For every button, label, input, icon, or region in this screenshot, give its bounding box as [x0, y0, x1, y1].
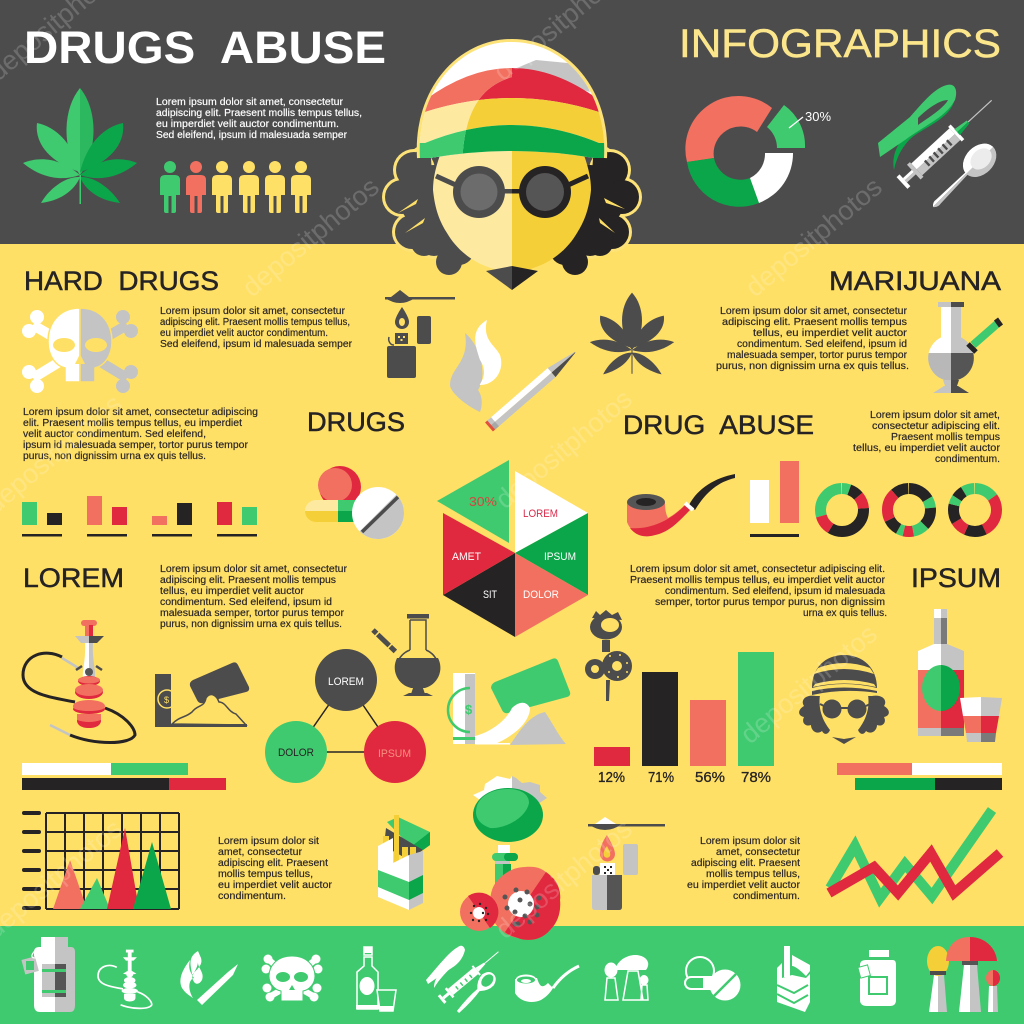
bar chart: percentages: 56%	[695, 769, 725, 786]
text block: marijuana: purus, non dignissim urna ex quis tellus.	[716, 361, 909, 372]
icon: poppy dark	[585, 610, 632, 701]
hexagon pie chart: 30%	[469, 494, 497, 509]
text block: bottom left: adipiscing elit. Praesent	[218, 858, 328, 869]
footer icon: smoke and cigarette	[180, 951, 238, 1005]
text block: ipsum: semper, tortor purus tempor purus, non dignissim	[655, 597, 885, 608]
watermarks: depositphotos	[735, 619, 883, 750]
footer icon: tourniquet, syringe and spoon	[426, 946, 502, 1017]
text block: left middle: Lorem ipsum dolor sit amet, consectetur adipiscing	[23, 407, 258, 418]
text block: bottom left	[218, 836, 333, 902]
network diagram: three circles: IPSUM	[378, 748, 411, 760]
icon: cannabis leaf green	[23, 88, 137, 204]
hexagon pie chart: IPSUM	[544, 551, 576, 563]
icon: rasta head dark	[799, 655, 889, 744]
text block: marijuana: condimentum. Sed eleifend, ipsum id	[737, 339, 907, 350]
icon: bottle and glass	[918, 609, 1002, 742]
icon: smoke and cigarette	[450, 320, 579, 432]
text block: right middle: consectetur adipiscing elit.	[872, 421, 1000, 432]
text block: header intro: Lorem ipsum dolor sit amet, consectetur	[156, 97, 344, 108]
text block: marijuana: malesuada semper, tortor purus tempor	[727, 350, 908, 361]
line chart: zigzag	[829, 810, 1000, 898]
heading: hard drugs: HARD DRUGS	[24, 266, 219, 296]
donut chart 30%	[685, 96, 831, 207]
title: infographics: INFOGRAPHICS	[679, 22, 1001, 66]
bar chart: percentages: 12%	[598, 769, 625, 786]
text block: bottom right	[687, 836, 801, 902]
icon: skull and crossbones	[22, 308, 138, 393]
grid area chart	[24, 813, 179, 909]
text block: left middle: ipsum id malesuada semper, tortor purus tempor	[23, 440, 249, 451]
text block: ipsum: condimentum. Sed eleifend, ipsum id malesuada	[665, 586, 885, 597]
icon: cigarette pack	[378, 815, 430, 910]
hexagon pie chart	[437, 460, 588, 637]
text block: marijuana: adipiscing elit. Praesent mollis tempus	[722, 317, 907, 328]
text block: right middle: Lorem ipsum dolor sit amet,	[870, 410, 1000, 421]
footer icon: pills white	[685, 957, 740, 1000]
heading: lorem: LOREM	[23, 563, 124, 593]
text block: right middle: Praesent mollis tempus	[891, 432, 1000, 443]
network diagram: three circles: DOLOR	[278, 747, 314, 759]
text block: hard drugs	[160, 306, 353, 350]
text block: lorem: malesuada semper, tortor purus tempor	[160, 608, 345, 619]
icon: pipe	[627, 474, 735, 536]
text block: ipsum: Lorem ipsum dolor sit amet, consectetur adipiscing elit.	[630, 564, 885, 575]
footer icon: bottle and glass outline	[356, 947, 396, 1011]
icon: cannabis leaf dark	[590, 293, 674, 374]
text block: bottom left: eu imperdiet velit auctor	[218, 880, 333, 891]
footer band	[0, 926, 1024, 1024]
hexagon pie chart: LOREM	[523, 508, 558, 520]
text block: left middle: purus, non dignissim urna ex quis tellus.	[23, 451, 206, 462]
heading: marijuana: MARIJUANA	[829, 266, 1001, 296]
bar chart: percentages	[594, 652, 774, 786]
text block: header intro: Sed eleifend, ipsum id malesuada semper	[156, 130, 348, 141]
bar chart: percentages: 78%	[741, 769, 771, 786]
icon: colored bong	[928, 302, 1001, 393]
central rasta head	[382, 30, 642, 290]
icon: cocaine card colored	[448, 658, 570, 745]
text block: right middle	[853, 410, 1001, 465]
network diagram: three circles: LOREM	[328, 676, 364, 688]
watermarks: depositphotos	[740, 172, 888, 303]
icon: cocaine card dark	[155, 662, 249, 727]
footer icon: hookah	[98, 950, 152, 1008]
footer icon: cigarette pack white	[777, 946, 810, 1012]
watermarks: depositphotos	[237, 172, 385, 303]
text block: lorem: condimentum. Sed eleifend, ipsum id	[160, 597, 332, 608]
heading: ipsum: IPSUM	[911, 563, 1001, 593]
stacked bars left	[22, 763, 226, 790]
text block: marijuana: tellus, eu imperdiet velit auctor	[753, 328, 908, 339]
text block: ipsum: Praesent mollis tempus tellus, eu imperdiet velit auctor	[630, 575, 886, 586]
text block: lorem: Lorem ipsum dolor sit amet, consectetur	[160, 564, 348, 575]
text block: bottom right: Lorem ipsum dolor sit	[700, 836, 800, 847]
donut charts trio	[820, 488, 996, 532]
text block: left middle: elit. Praesent mollis tempus tellus, eu imperdiet	[23, 418, 242, 429]
bar chart: percentages: 71%	[648, 769, 674, 786]
text block: hard drugs: Sed eleifend, ipsum id malesuada semper	[160, 339, 353, 350]
heading: drug abuse: DRUG ABUSE	[623, 410, 814, 440]
text block: bottom left: amet, consectetur	[218, 847, 303, 858]
bar chart groups left	[22, 496, 257, 536]
text block: hard drugs: Lorem ipsum dolor sit amet, consectetur	[160, 306, 346, 317]
icon: cocaine card colored: $	[465, 702, 473, 717]
text block: marijuana: Lorem ipsum dolor sit amet, consectetur	[720, 306, 908, 317]
icon: pills	[305, 466, 404, 539]
text block: right middle: tellus, eu imperdiet velit auctor	[853, 443, 1001, 454]
text block: bottom right: mollis tempus tellus,	[706, 869, 800, 880]
footer icon: pipe	[515, 966, 579, 1002]
text block: header intro	[156, 97, 362, 141]
text block: right middle: condimentum.	[935, 454, 1000, 465]
text block: bottom right: adipiscing elit. Praesent	[691, 858, 800, 869]
footer icon: mushrooms white	[604, 955, 648, 1000]
text block: bottom left: condimentum.	[218, 891, 286, 902]
text block: ipsum	[630, 564, 887, 619]
text block: bottom right: condimentum.	[733, 891, 800, 902]
text block: lorem: purus, non dignissim urna ex quis tellus.	[160, 619, 342, 630]
text block: lorem: tellus, eu imperdiet velit auctor	[160, 586, 305, 597]
watermarks	[0, 0, 888, 945]
icon: tourniquet, syringe and spoon	[878, 85, 1003, 217]
text block: bottom left: mollis tempus tellus,	[218, 869, 313, 880]
text block: header intro: eu imperdiet velit auctor condimentum.	[156, 119, 339, 130]
donut chart 30%: 30%	[805, 110, 831, 124]
bar chart: white and salmon	[750, 461, 799, 537]
text block: bottom left: Lorem ipsum dolor sit	[218, 836, 319, 847]
footer icon: mushrooms colored	[927, 937, 1000, 1012]
watermarks: depositphotos	[490, 384, 638, 515]
text block: ipsum: urna ex quis tellus.	[803, 608, 887, 619]
text block: lorem	[160, 564, 348, 630]
pictogram row: six people	[160, 161, 311, 213]
text block: header intro: adipiscing elit. Praesent mollis tempus tellus,	[156, 108, 362, 119]
text block: hard drugs: eu imperdiet velit auctor condimentum.	[160, 328, 328, 339]
text block: marijuana	[716, 306, 909, 372]
footer icon: medicine bottle	[21, 937, 75, 1012]
stacked bars right	[837, 763, 1002, 790]
text block: hard drugs: adipiscing elit. Praesent mollis tempus tellus,	[160, 317, 350, 328]
footer icon: bottle white	[858, 950, 896, 1006]
hexagon pie chart: SIT	[483, 589, 497, 601]
title: drugs abuse: DRUGS ABUSE	[24, 22, 386, 73]
hexagon pie chart: AMET	[452, 551, 481, 563]
hexagon pie chart: DOLOR	[523, 589, 559, 601]
watermarks: depositphotos	[490, 814, 638, 945]
heading: drugs: DRUGS	[307, 407, 405, 437]
icon: cocaine card dark: $	[164, 695, 169, 705]
header band	[0, 0, 1024, 244]
text block: left middle	[23, 407, 258, 462]
network diagram: three circles	[265, 649, 426, 783]
text block: bottom right: eu imperdiet velit auctor	[687, 880, 801, 891]
text block: left middle: velit auctor condimentum. Sed eleifend,	[23, 429, 206, 440]
icon: spoon and lighter dark	[385, 290, 455, 378]
icon: bong dark	[373, 614, 440, 696]
text block: bottom right: amet, consectetur	[716, 847, 801, 858]
footer icon: skull and crossbones	[262, 954, 322, 1002]
icon: hookah	[23, 620, 135, 742]
icon: spoon and lighter colored	[588, 817, 665, 910]
icon: poppy plant colored	[460, 776, 560, 940]
text block: lorem: adipiscing elit. Praesent mollis tempus	[160, 575, 336, 586]
